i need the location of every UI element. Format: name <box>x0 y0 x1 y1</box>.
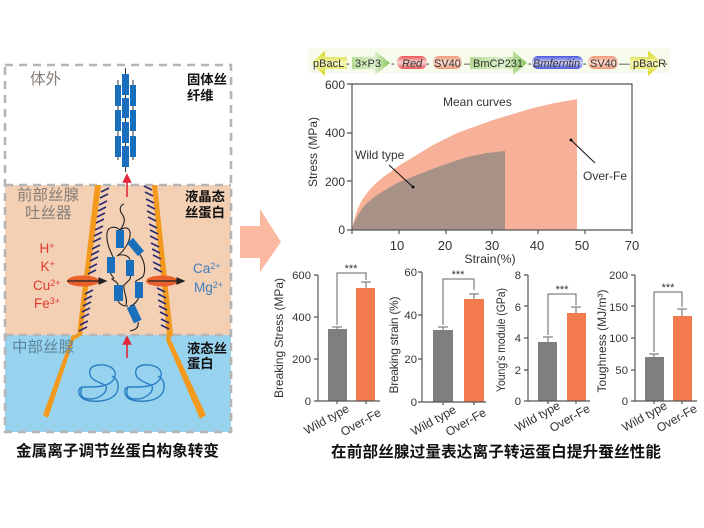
label: liquid silk protein: 液态丝 <box>187 340 227 356</box>
construct labels: 3×P3 <box>355 58 381 70</box>
ticks: 0 <box>622 396 628 408</box>
title: left panel caption: 金属离子调节丝蛋白构象转变 <box>16 441 219 460</box>
element: pBacR arrow <box>630 51 663 76</box>
label: in vitro: 体外 <box>30 67 61 89</box>
region: anterior silk gland background <box>5 185 231 335</box>
y tick labels: 600 <box>325 78 345 92</box>
error bars and bracket <box>438 279 479 330</box>
gland wall: right <box>152 185 206 419</box>
panel: silk gland diagram <box>5 65 231 432</box>
bar chart: Young's modulus <box>494 270 593 435</box>
axes <box>631 275 697 404</box>
label: liquid silk protein: 蛋白 <box>187 355 214 371</box>
construct labels: - <box>346 58 350 70</box>
axes frame <box>347 84 632 234</box>
ticks: 2 <box>515 365 521 377</box>
bar chart: breaking stress <box>272 263 384 439</box>
ticks: 200 <box>292 354 311 366</box>
ticks: 100 <box>609 333 628 345</box>
label: Over-Fe: Over-Fe <box>583 169 627 183</box>
x tick labels: 50 <box>575 238 589 253</box>
category: Over-Fe: Over-Fe <box>547 401 593 435</box>
bar Over-Fe <box>673 316 692 401</box>
x tick labels: 40 <box>530 238 544 253</box>
ticks: 6 <box>515 302 521 314</box>
ticks: 600 <box>292 270 311 282</box>
bar wild type <box>433 330 453 402</box>
y tick labels: 0 <box>338 223 345 237</box>
ticks: 150 <box>609 302 628 314</box>
icon: solid silk fibre <box>115 68 136 172</box>
x tick labels: 70 <box>625 238 639 253</box>
area: wild type <box>352 151 505 230</box>
leader: Over-Fe <box>571 140 595 163</box>
leader dot: Over-Fe <box>570 138 572 142</box>
label: influx ions: H <box>40 241 49 256</box>
label: influx ions: K <box>40 259 50 274</box>
label: efflux ions: Ca <box>193 261 211 276</box>
axes <box>418 272 486 405</box>
label: efflux ions: Mg <box>194 280 213 295</box>
construct labels: Bmferritin <box>533 58 580 70</box>
significance: *** <box>662 282 675 294</box>
y label: Breaking strain (%) <box>387 296 401 394</box>
axes <box>314 275 380 404</box>
element: Bmferritin <box>532 56 583 69</box>
ticks: 50 <box>615 365 628 377</box>
label: influx ions: 2+ <box>50 278 61 288</box>
category: wild type: Wild type <box>301 401 352 438</box>
construct background <box>308 48 670 73</box>
construct labels: SV40 <box>590 58 617 70</box>
ticks: 0 <box>411 397 417 409</box>
ion channel: right <box>146 276 178 286</box>
label: wild type: Wild type <box>355 148 405 162</box>
leader: wild type <box>389 165 413 187</box>
region: middle silk gland background <box>5 335 231 432</box>
construct labels: pBacL <box>313 58 344 70</box>
y tick labels: 200 <box>325 175 345 189</box>
label: influx ions: 3+ <box>50 296 60 306</box>
category: Over-Fe: Over-Fe <box>443 405 489 439</box>
category: Over-Fe: Over-Fe <box>654 401 700 435</box>
element: BmCP231 arrow <box>470 51 527 75</box>
label: influx ions: Fe <box>34 296 50 311</box>
element: 3xP3 arrow <box>352 51 390 75</box>
bar Over-Fe <box>464 299 484 402</box>
construct labels: - <box>664 58 668 70</box>
significance: *** <box>345 263 358 275</box>
bar wild type <box>328 329 347 401</box>
error bars and bracket <box>649 292 687 357</box>
label: solid silk fibre: 纤维 <box>187 87 214 103</box>
construct labels: - <box>528 58 532 70</box>
title: right panel caption: 在前部丝腺过量表达离子转运蛋白提升蚕丝性能 <box>331 442 661 461</box>
label: solid silk fibre: 固体丝 <box>187 71 227 87</box>
bar Over-Fe <box>356 288 375 401</box>
category: wild type: Wild type <box>512 398 563 435</box>
ticks: 4 <box>515 333 521 345</box>
error bars and bracket <box>543 294 581 342</box>
icon: liquid silk protein coils <box>79 365 164 401</box>
ticks: 400 <box>292 312 311 324</box>
bar wild type <box>538 342 557 401</box>
label: anterior silk gland spinneret: 前部丝腺 <box>17 183 80 205</box>
hatching: right membrane <box>144 186 169 329</box>
construct labels: Red <box>402 58 423 70</box>
x tick labels: 10 <box>390 238 404 253</box>
label: influx ions: Cu <box>33 278 50 293</box>
category: wild type: Wild type <box>408 402 459 439</box>
bar chart: toughness <box>595 270 700 435</box>
ticks: 0 <box>305 396 311 408</box>
arrow: red upper <box>124 175 130 197</box>
y tick labels: 400 <box>325 126 345 140</box>
ticks: 40 <box>404 310 417 322</box>
label: liquid crystal silk protein: 丝蛋白 <box>185 204 225 220</box>
construct labels: — <box>619 58 630 70</box>
element: Red <box>397 56 427 69</box>
ticks: 60 <box>404 267 417 279</box>
label: liquid crystal silk protein: 液晶态 <box>185 188 225 204</box>
error bars and bracket <box>332 273 371 329</box>
icon: liquid crystal protein <box>107 204 145 331</box>
construct labels: - <box>426 58 430 70</box>
label: efflux ions: 2+ <box>213 280 223 290</box>
bar Over-Fe <box>567 313 586 401</box>
x tick labels: 30 <box>485 238 499 253</box>
construct labels: pBacR <box>633 58 666 70</box>
label: middle silk gland: 中部丝腺 <box>12 335 75 357</box>
construct labels: – <box>464 58 471 70</box>
element: SV40 <box>433 56 462 69</box>
x tick labels: 20 <box>438 238 452 253</box>
y label: Breaking Stress (MPa) <box>272 278 286 398</box>
dashed outline <box>5 65 231 432</box>
bar wild type <box>645 357 664 401</box>
chart: stress strain curves <box>306 78 639 266</box>
arrow: ion influx left <box>67 278 106 284</box>
gene construct <box>308 48 670 76</box>
arrow: red lower <box>124 337 130 358</box>
significance: *** <box>556 284 569 296</box>
label: influx ions: + <box>49 241 55 251</box>
bar chart: breaking strain <box>387 267 489 439</box>
ticks: 8 <box>515 270 521 282</box>
ticks: 20 <box>404 354 417 366</box>
label: efflux ions: 2+ <box>210 261 221 271</box>
category: Over-Fe: Over-Fe <box>338 405 384 439</box>
significance: *** <box>452 269 465 281</box>
leader dot: wild type <box>412 186 414 188</box>
axes <box>524 275 590 404</box>
construct label: BmCP231: BmCP231 <box>473 58 523 70</box>
label: anterior silk gland spinneret: 吐丝器 <box>25 201 72 223</box>
arrow: ion efflux right <box>148 278 184 284</box>
y label: Toughness (MJ/m³) <box>595 290 609 392</box>
element: pBacL arrow <box>311 51 347 76</box>
axis title: strain: Strain(%) <box>464 252 516 266</box>
area: Over-Fe <box>352 99 577 230</box>
category: wild type: Wild type <box>619 398 670 435</box>
hatching: left membrane <box>79 188 109 331</box>
label: influx ions: + <box>50 259 55 269</box>
ticks: 0 <box>515 396 521 408</box>
ion channel: left <box>67 276 99 286</box>
axis title: stress: Stress (MPa) <box>306 117 320 187</box>
gland wall: left <box>43 185 101 418</box>
construct labels: - <box>391 58 395 70</box>
construct labels: SV40 <box>434 58 461 70</box>
y label: Young's module (GPa) <box>494 288 508 392</box>
construct labels: - <box>583 58 587 70</box>
ticks: 200 <box>609 270 628 282</box>
arrow: large peach arrow <box>240 209 281 272</box>
chart title: Mean curves <box>443 95 512 109</box>
element: SV40 second <box>588 56 618 69</box>
